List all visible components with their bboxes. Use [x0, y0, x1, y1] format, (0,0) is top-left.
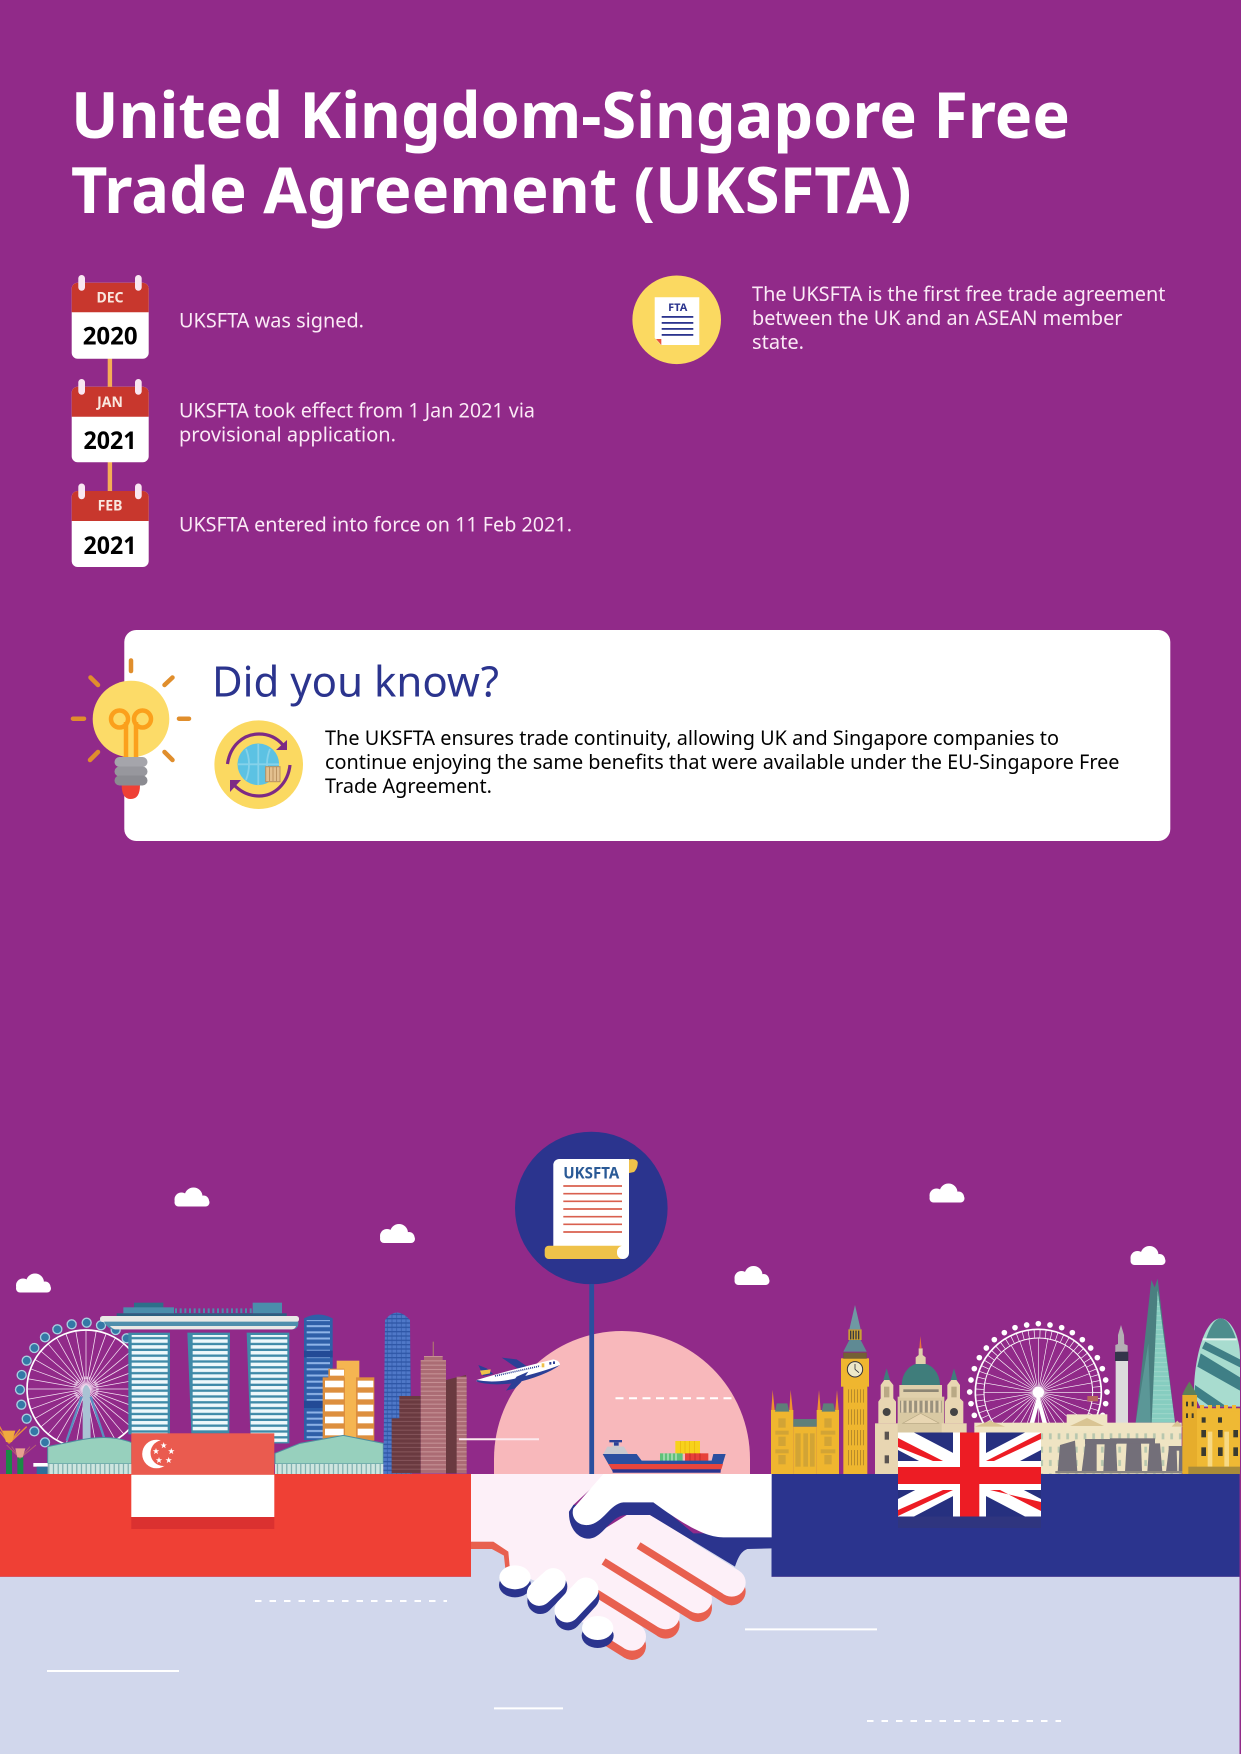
calendar: Feb 2021: 2021 — [84, 529, 136, 562]
band: red Singapore — [0, 1474, 471, 1577]
Supertrees — [0, 1426, 48, 1474]
timeline text: took effect — [179, 397, 535, 448]
blue tower — [304, 1314, 333, 1440]
ground: lavender — [0, 1540, 1240, 1754]
did you know text: Trade Agreement. — [325, 772, 492, 799]
band: blue UK — [772, 1474, 1240, 1577]
Nelson's Column — [1115, 1325, 1128, 1423]
timeline text: signed: UKSFTA was signed. — [179, 306, 364, 333]
Gardens by the Bay domes — [48, 1435, 383, 1474]
timeline text: took effect: UKSFTA took effect from 1 Jan 2021 via — [179, 397, 535, 424]
scroll: UKSFTA — [563, 1161, 620, 1183]
knuckles — [499, 1565, 614, 1648]
fingers — [589, 1528, 746, 1660]
panel background — [124, 630, 1170, 841]
Big Ben — [841, 1305, 869, 1474]
brown buildings — [392, 1342, 467, 1473]
panel: did you know — [73, 630, 1170, 841]
pink sun circle — [494, 1331, 750, 1474]
Houses of Parliament — [771, 1390, 839, 1474]
Singapore Flyer wheel — [15, 1318, 145, 1448]
pole — [589, 1284, 594, 1474]
Buckingham Palace — [974, 1414, 1183, 1474]
first FTA text — [752, 280, 1166, 355]
did you know text: continue enjoying the same benefits that were available under the EU-Singapore Free — [325, 748, 1120, 775]
timeline text: took effect: provisional application. — [179, 421, 396, 448]
calendar: Feb 2021: FEB — [98, 497, 122, 516]
calendar: Dec 2020: DEC — [96, 289, 124, 308]
scroll — [545, 1159, 638, 1259]
London Eye — [967, 1321, 1110, 1455]
calendar: Jan 2021: JAN — [95, 393, 123, 412]
left sleeve cuff line — [471, 1545, 509, 1568]
calendar: Jan 2021 — [72, 379, 149, 462]
did you know text: The UKSFTA ensures trade continuity, allowing UK and Singapore companies to — [325, 724, 1059, 751]
Stonehenge — [1055, 1438, 1189, 1473]
calendar: Dec 2020: 2020 — [83, 319, 138, 352]
calendar: Feb 2021 — [72, 484, 149, 567]
navy circle — [515, 1132, 668, 1284]
Marina Bay Sands — [100, 1303, 299, 1443]
icon: FTA document: FTA — [668, 300, 688, 315]
calendar: Dec 2020 — [72, 275, 149, 359]
timeline connectors — [108, 358, 112, 492]
handshake — [471, 1474, 772, 1660]
icon: globe with arrows — [214, 720, 303, 809]
icon: FTA document — [632, 276, 721, 364]
flag: United Kingdom — [898, 1432, 1041, 1528]
Tower of London — [1182, 1382, 1240, 1474]
St Paul's Cathedral — [875, 1336, 967, 1474]
first FTA text: The UKSFTA is the first free trade agreement — [752, 280, 1166, 307]
right hand and sleeve — [573, 1474, 772, 1537]
first FTA text: between the UK and an ASEAN member — [752, 304, 1122, 331]
timeline text: entered into force: UKSFTA entered into force on 11 Feb 2021. — [179, 511, 572, 538]
first FTA text: state. — [752, 328, 804, 355]
did you know text — [325, 724, 1120, 799]
timeline — [72, 275, 149, 567]
skyline: London — [771, 1279, 1240, 1474]
blue skyscraper — [383, 1312, 412, 1474]
icon: light bulb — [73, 660, 189, 799]
scroll badge — [515, 1132, 668, 1474]
flag: Singapore — [131, 1433, 274, 1529]
title: United Kingdom-Singapore Free — [71, 70, 1070, 157]
cargo ship — [603, 1440, 726, 1473]
The Shard — [1136, 1279, 1175, 1423]
orange building — [323, 1361, 374, 1441]
right hand shadow — [569, 1500, 772, 1567]
left hand palm — [471, 1474, 693, 1617]
calendar: Jan 2021: 2021 — [84, 424, 136, 457]
title: Trade Agreement (UKSFTA) — [71, 145, 912, 232]
skyline: Singapore — [0, 1303, 467, 1474]
title — [71, 70, 1070, 232]
heading: Did you know? — [212, 653, 499, 710]
airplane — [477, 1358, 560, 1391]
decorative speed lines — [47, 1398, 1061, 1721]
The Gherkin — [1194, 1318, 1240, 1407]
clouds — [16, 1184, 1166, 1292]
